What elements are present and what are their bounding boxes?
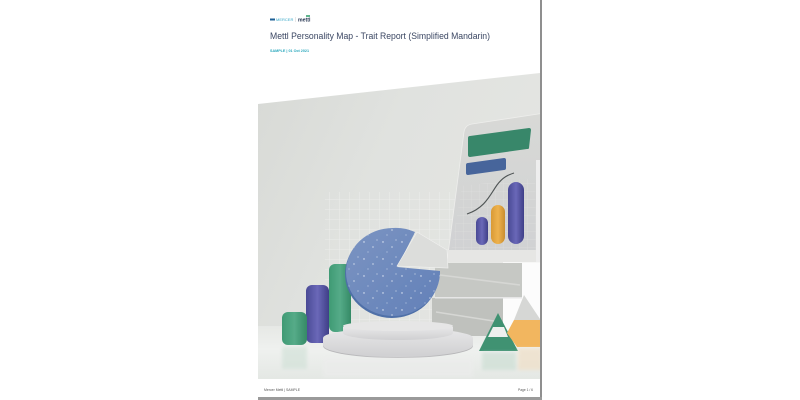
glass tablet chart — [447, 113, 545, 262]
pie chart — [345, 228, 448, 318]
marble pie wedge — [397, 232, 448, 268]
green header bar — [468, 128, 531, 157]
report cover infographic — [258, 0, 542, 400]
podium — [323, 321, 473, 358]
glossy floor — [258, 326, 540, 379]
footer page number: Page 1 / 6 — [518, 387, 533, 392]
wall background — [258, 73, 540, 326]
report date line: SAMPLE | 01 Oct 2021 — [270, 48, 310, 53]
trend curve — [467, 173, 514, 214]
purple cylinder — [306, 285, 329, 343]
cover illustration — [250, 65, 545, 384]
blue label bar — [466, 158, 506, 175]
floor reflections — [282, 346, 540, 370]
logos: Mercer and Mettl: MERCER — [276, 17, 293, 22]
logos: Mercer and Mettl: mettl — [298, 17, 311, 23]
small green cylinder — [282, 312, 307, 345]
footer left text: Mercer Mettl | SAMPLE — [264, 387, 300, 392]
orange bar — [491, 205, 505, 244]
short purple bar — [476, 217, 488, 245]
orange and grey pyramid — [507, 295, 540, 347]
logos: Mercer and Mettl — [270, 15, 311, 23]
tall green cylinder — [329, 264, 351, 332]
marble blocks — [432, 263, 522, 336]
page sheet — [258, 0, 542, 400]
wire grid backdrop — [325, 192, 455, 327]
green and white pyramid — [479, 313, 518, 351]
white background panel at right — [503, 262, 543, 347]
tall purple bar — [508, 182, 524, 244]
title: Mettl Personality Map - Trait Report (Simplified Mandarin) — [270, 31, 490, 41]
